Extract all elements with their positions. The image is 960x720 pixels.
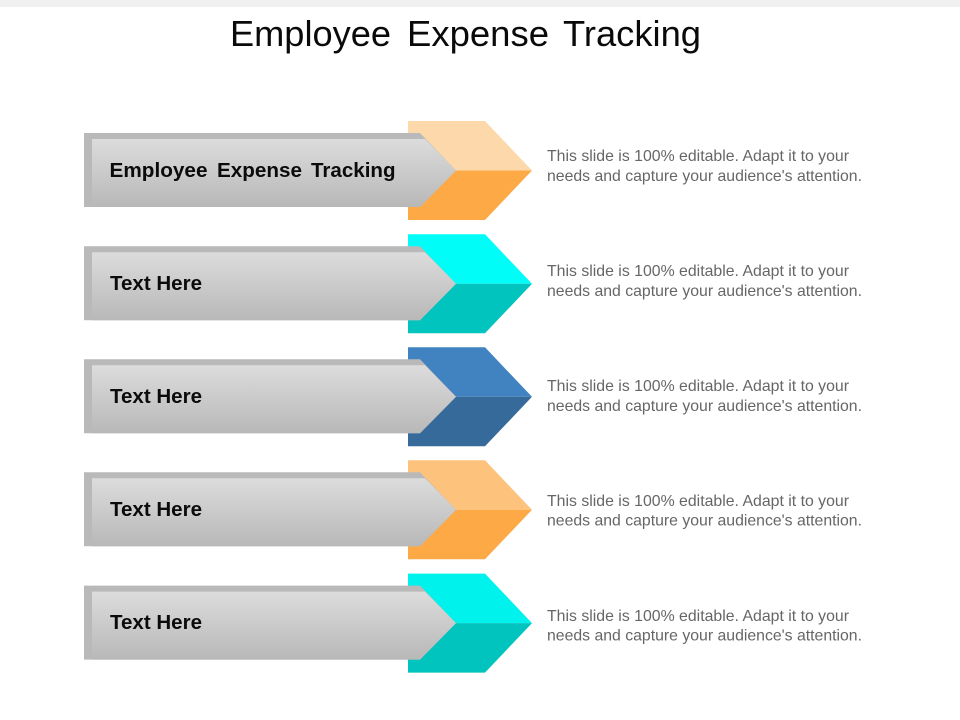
gray arrow banner	[84, 133, 456, 207]
description: This slide is 100% editable. Adapt it to your	[547, 493, 850, 510]
banner label: Text Here	[110, 272, 202, 295]
description: needs and capture your audience's attention.	[547, 398, 862, 415]
icon: cyan chevron	[408, 234, 532, 333]
gray arrow banner	[84, 246, 456, 320]
description: This slide is 100% editable. Adapt it to your	[547, 378, 850, 395]
row 4	[84, 460, 862, 559]
row 1	[84, 121, 862, 220]
description: This slide is 100% editable. Adapt it to your	[547, 608, 850, 625]
title: Tracking	[563, 13, 701, 54]
gray arrow banner	[84, 586, 456, 660]
row 2	[84, 234, 862, 333]
icon: blue chevron	[408, 347, 532, 446]
row 5	[84, 574, 862, 673]
icon: orange chevron	[408, 460, 532, 559]
description: This slide is 100% editable. Adapt it to your	[547, 148, 850, 165]
description: needs and capture your audience's attention.	[547, 283, 862, 300]
banner label: Tracking	[311, 159, 396, 182]
title: Expense	[407, 13, 549, 54]
banner label: Text Here	[110, 498, 202, 521]
row 3	[84, 347, 862, 446]
banner label: Text Here	[110, 611, 202, 634]
icon: cyan chevron	[408, 574, 532, 673]
title: Employee	[230, 13, 391, 54]
gray arrow banner	[84, 472, 456, 546]
banner label: Expense	[217, 159, 302, 182]
icon: orange chevron	[408, 121, 532, 220]
banner label: Text Here	[110, 385, 202, 408]
description: needs and capture your audience's attention.	[547, 168, 862, 185]
description: This slide is 100% editable. Adapt it to your	[547, 263, 850, 280]
gray arrow banner	[84, 359, 456, 433]
description: needs and capture your audience's attention.	[547, 627, 862, 644]
banner label: Employee	[110, 159, 208, 182]
description: needs and capture your audience's attention.	[547, 512, 862, 529]
